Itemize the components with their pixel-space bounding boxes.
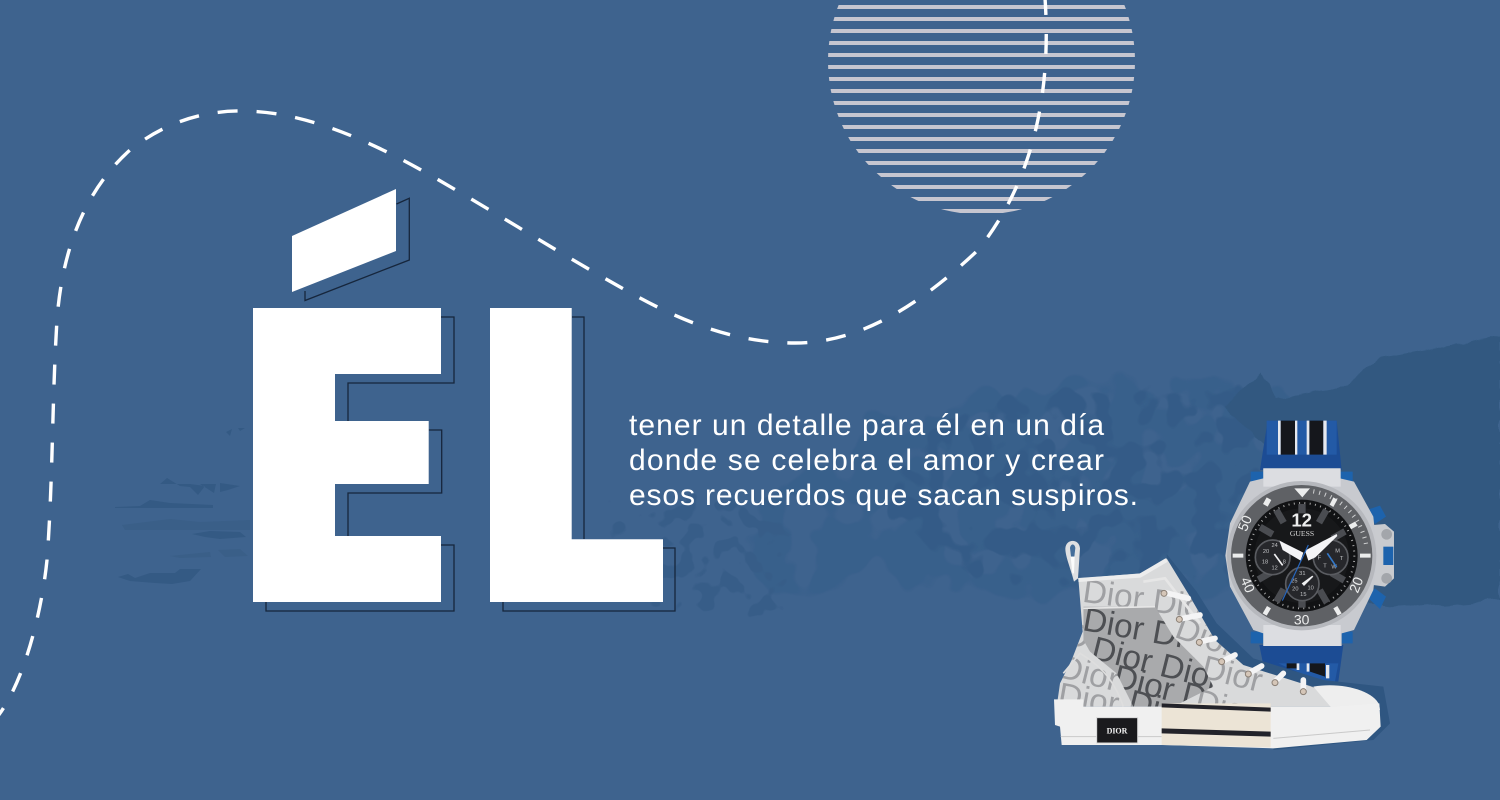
sub-dial numerals: 18 <box>1262 559 1268 565</box>
sneaker toe cap <box>1313 685 1380 710</box>
bezel markers <box>1233 488 1371 616</box>
sneaker laces <box>1165 593 1303 691</box>
sneaker light monogram: Dior Dior Dior Dior <box>1055 649 1328 750</box>
brush dark block <box>1225 336 1500 608</box>
watch lugs <box>1251 472 1353 643</box>
watch case <box>1225 468 1377 646</box>
sneaker dark mid panel: Dior Dior <box>1088 630 1225 698</box>
sub-dial numerals: T <box>1340 556 1344 562</box>
sub-dial numerals <box>1262 543 1344 598</box>
bezel numerals: 50 <box>1234 513 1255 533</box>
sub-dial numerals: 8 <box>1283 560 1286 566</box>
sneaker beige stripe <box>1162 703 1271 747</box>
sub-dial numerals: 12 <box>1272 565 1278 571</box>
sub-dial numerals: 25 <box>1291 578 1297 584</box>
brush patches <box>720 372 1380 615</box>
watch hands <box>1274 534 1337 601</box>
sub-dial numerals: 10 <box>1308 585 1314 591</box>
product: sneaker <box>1054 540 1390 750</box>
sneaker pull tab <box>1065 541 1080 582</box>
sneaker label: DIOR <box>1107 727 1128 736</box>
dial numeral and brand: 12 <box>1291 510 1312 531</box>
striped circle <box>820 5 1150 213</box>
letter: accent <box>292 189 396 292</box>
letter: L <box>490 308 663 602</box>
letter shadow outlines <box>266 198 675 611</box>
sub-dial numerals: W <box>1331 565 1337 571</box>
sneaker dark mid panel: Dior Dior <box>1110 659 1246 726</box>
bezel numerals <box>1234 513 1366 628</box>
sneaker light monogram <box>1060 580 1314 706</box>
sneaker shadow <box>1167 554 1390 750</box>
sneaker light monogram: Dior Dior <box>1081 573 1216 628</box>
sneaker light monogram: Dior Dior Dior <box>1171 609 1373 713</box>
sub-dial numerals: M <box>1335 548 1340 554</box>
letter: E <box>253 308 441 602</box>
sneaker label <box>1097 718 1138 743</box>
product: watch <box>1225 421 1394 682</box>
brush texture: left faint <box>122 519 250 558</box>
sneaker dark mid panel: Dior Dior <box>1080 601 1216 661</box>
dial batons <box>1257 504 1347 608</box>
body text: esos recuerdos que sacan suspiros. <box>629 479 1138 512</box>
bezel numerals: 30 <box>1294 612 1310 628</box>
sub-dial numerals: 20 <box>1292 587 1298 593</box>
watch dial <box>1246 500 1358 612</box>
dashed path <box>0 0 1046 716</box>
watch strap <box>1259 421 1343 682</box>
bezel ticks <box>1313 491 1366 544</box>
sneaker eyelets <box>1161 590 1306 695</box>
product: watch: GUESS <box>1290 529 1314 538</box>
sneaker upper <box>1057 558 1337 707</box>
sub-dials <box>1255 540 1348 601</box>
brush texture: right side <box>720 336 1500 615</box>
sneaker dark mid panel <box>1084 606 1214 706</box>
brush texture: left splatter <box>115 428 246 584</box>
sub-dial numerals: 24 <box>1272 543 1278 549</box>
brush dark patches <box>860 375 1340 600</box>
sub-dial numerals: T <box>1323 563 1327 569</box>
body text: donde se celebra el amor y crear <box>629 444 1104 477</box>
sub-dial numerals: 15 <box>1300 592 1306 598</box>
sneaker collar seam <box>1078 560 1167 580</box>
watch crown and pushers <box>1367 506 1394 609</box>
watch bezel <box>1231 485 1372 626</box>
sneaker light monogram: Dior Dior Dior <box>1061 615 1266 700</box>
sub-dial numerals: 20 <box>1263 549 1269 555</box>
sneaker sole <box>1054 699 1381 748</box>
sub-dial numerals: 31 <box>1299 571 1305 577</box>
body text: tener un detalle para él en un día <box>629 409 1104 442</box>
sneaker light monogram: Dior Dior Dior Dior Dior <box>1055 676 1399 772</box>
title: ÉL letters <box>253 189 675 611</box>
sub-dial numerals: F <box>1318 555 1322 561</box>
bezel numerals: 40 <box>1238 575 1258 595</box>
bezel numerals: 20 <box>1346 574 1366 595</box>
sneaker dark mid panel: Dior Dior <box>1125 684 1261 751</box>
brush texture: centre splatter <box>590 480 800 630</box>
body text <box>629 409 1138 512</box>
